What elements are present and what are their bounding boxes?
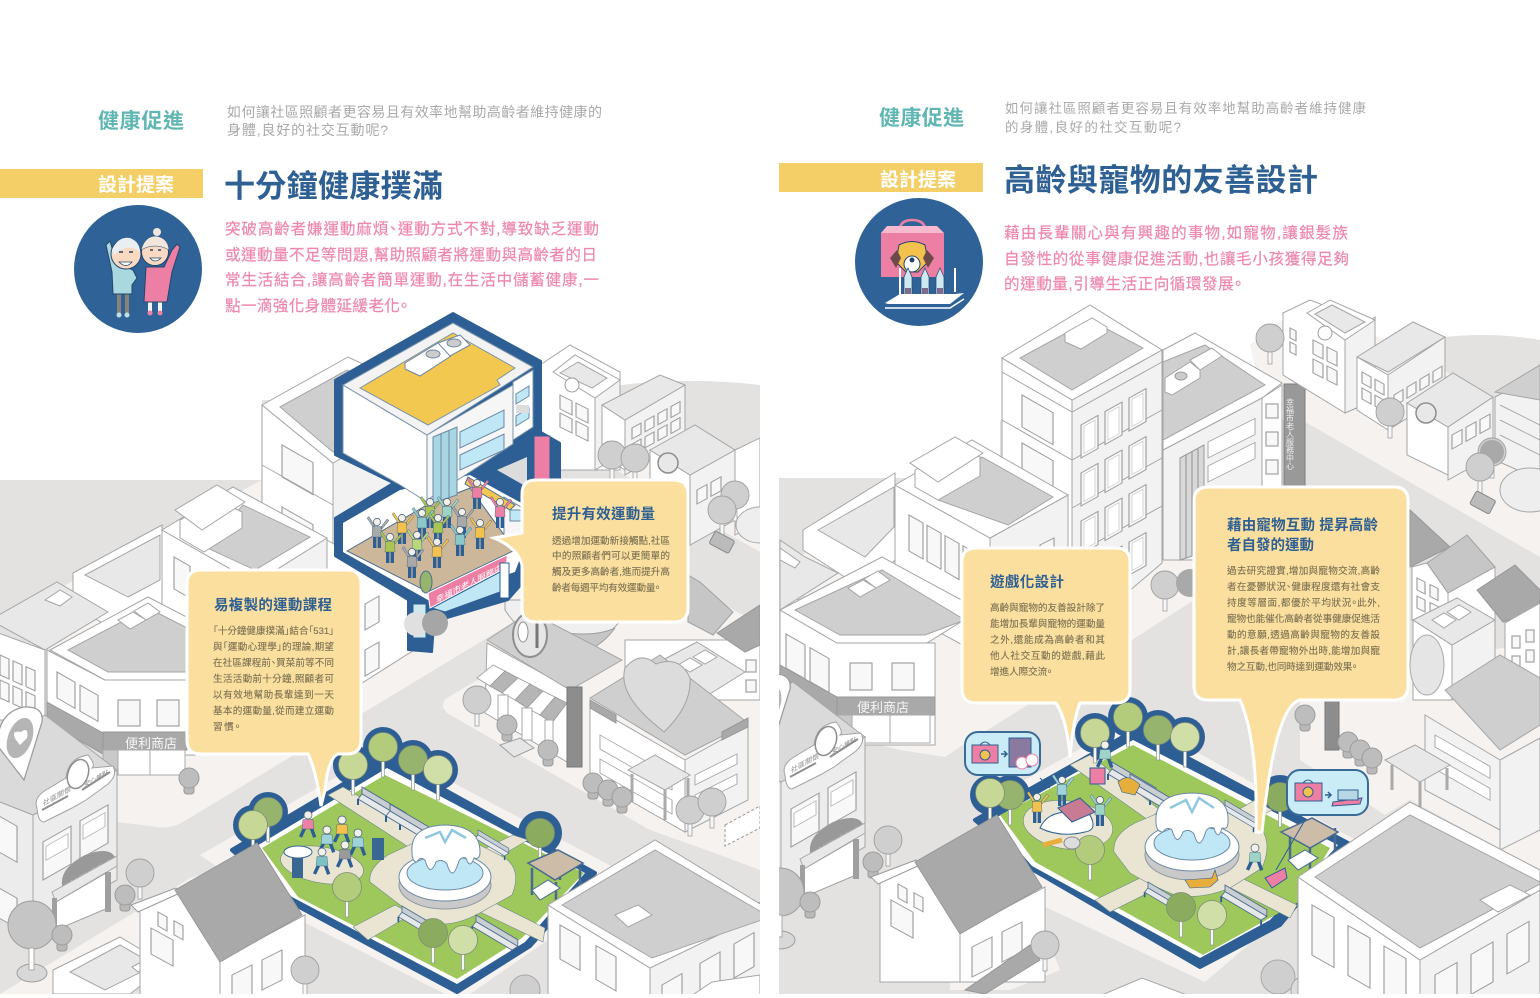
building: convenience store (46, 596, 200, 794)
trees front right (1076, 836, 1104, 880)
callout: gamified design (962, 548, 1130, 757)
vertical sign right panel: 幸福市老人服務中心 (1286, 398, 1294, 470)
pink vertical sign (534, 436, 550, 488)
paths (328, 786, 416, 846)
proposal title: 十分鐘健康撲滿 (224, 169, 443, 204)
icon bubble: game (965, 732, 1050, 788)
callout body: 動的意願,透過高齡與寵物的友善設 (1227, 629, 1380, 641)
building: mid rear (598, 375, 685, 484)
callout body: 物之互動,也同時達到運動效果。 (1227, 661, 1357, 673)
tag bar (0, 169, 203, 198)
icon: seniors waving (74, 205, 202, 333)
building back right with AC right panel (1410, 598, 1495, 700)
building: flat low roof (72, 524, 162, 622)
road base left (0, 381, 760, 994)
callout title (1227, 516, 1378, 554)
callout body: 計,讓長者帶寵物外出時,能增加與寵 (1227, 645, 1380, 657)
park outline right (975, 730, 1348, 967)
triangle courtyard (497, 457, 527, 487)
callout body: 觸及更多高齡者,進而提升高 (552, 566, 670, 578)
question text: 如何讓社區照顧者更容易且有效率地幫助高齡者維持健康的 (227, 104, 602, 120)
callout body: 基本的運動量,從而建立運動 (213, 705, 334, 717)
callout body: 持度等層面,都優於平均狀況。此外, (1227, 597, 1380, 609)
sidewalks left (0, 462, 760, 994)
building: tall rear centre (1002, 305, 1162, 650)
callout body: 增進人際交流。 (990, 666, 1052, 678)
heading: health promotion: 健康促進 (879, 106, 964, 130)
front column (500, 563, 509, 598)
house with grey roof (131, 843, 305, 998)
pink description: 或運動量不足等問題,幫助照顧者將運動與高齡者的日 (225, 245, 597, 264)
building: bottom right big right panel (1298, 802, 1540, 998)
fountain right (1145, 793, 1239, 880)
senior with dog and bottle game (1185, 820, 1305, 888)
pavilion right (1281, 818, 1338, 870)
group exercise runners (284, 811, 384, 878)
building: rear tall block (261, 356, 390, 544)
people exercising (367, 478, 512, 593)
tree bottom centre (510, 974, 540, 994)
trees back (338, 750, 368, 795)
game table with seniors (1027, 774, 1112, 849)
fountain (399, 825, 491, 909)
callout body: 中的照顧者們可以更簡單的 (552, 550, 670, 562)
house with grey roof right panel (871, 815, 1045, 982)
icon: dog carrier and bottles (855, 198, 983, 326)
callout body: 寵物也能催化高齡者從事健康促進活 (1227, 613, 1380, 625)
callout body: 透過增加運動新接觸點,社區 (552, 535, 670, 547)
rear clock building right panel (1256, 300, 1380, 418)
pink description (225, 220, 599, 315)
building: small light roof right panel (780, 540, 838, 660)
trees front (332, 872, 362, 917)
highlighted community building (335, 313, 560, 652)
park right (965, 697, 1368, 967)
trees back right (1080, 718, 1110, 763)
upper walls (343, 385, 427, 502)
building: back right with AC (625, 575, 760, 700)
icon bubble: bottles (1287, 770, 1368, 815)
road base right (779, 335, 1540, 994)
building: community center with pin sign (0, 707, 154, 982)
callout body: 習慣。 (213, 721, 240, 733)
pink description: 藉由長輩關心與有興趣的事物,如寵物,讓銀髮族 (1004, 223, 1348, 242)
question text: 如何讓社區照顧者更容易且有效率地幫助高齡者維持健康 (1005, 100, 1366, 116)
question text: 身體,良好的社交互動呢? (227, 122, 388, 138)
pink description: 的運動量,引導生活正向循環發展。 (1004, 275, 1242, 293)
low building with round sign right panel (1407, 365, 1540, 514)
blue outline (335, 313, 560, 652)
callout title: 提升有效運動量 (552, 505, 655, 523)
callout body (552, 535, 670, 594)
label: convenience store right: 便利商店 (857, 700, 909, 715)
callout: pet interaction (1194, 487, 1408, 832)
callout title: 藉由寵物互動 提昇高齡 (1227, 516, 1378, 534)
building: convenience store right panel (780, 557, 980, 745)
callout body: 高齡與寵物的友善設計除了 (990, 602, 1105, 614)
rear shop wall (504, 497, 526, 545)
callout body: 「十分鐘健康撲滿」結合「531」 (213, 625, 334, 637)
paths right (1070, 755, 1160, 820)
roof (343, 323, 533, 435)
callout body: 過去研究證實,增加與寵物交流,高齡 (1227, 565, 1380, 577)
glass columns (433, 427, 457, 503)
park left (232, 727, 595, 992)
houses behind callout right panel (1410, 510, 1540, 690)
callout body: 在社區課程前、買菜前等不同 (213, 657, 334, 669)
rear building with AC right panel (1151, 333, 1282, 611)
panel: left proposal (0, 313, 784, 998)
pavilion (528, 850, 583, 905)
building: dome restaurant (463, 600, 640, 767)
tree bottom (291, 956, 319, 996)
callout body (213, 625, 334, 733)
callout body: 能增加長輩與寵物的運動量 (990, 618, 1105, 630)
AC units (405, 343, 451, 376)
building: with penthouse right panel (895, 437, 1068, 660)
heading: health promotion: 健康促進 (98, 109, 184, 133)
header left (0, 104, 602, 333)
building: bottom right (548, 840, 770, 998)
rear building right panel 2 (1357, 322, 1445, 438)
pink description: 點一滴強化身體延緩老化。 (225, 297, 408, 315)
building: heart on roof (590, 655, 748, 832)
header right (779, 100, 1366, 326)
pink description: 常生活結合,讓高齡者簡單運動,在生活中儲蓄健康,一 (225, 270, 599, 289)
building: small light roof left (0, 582, 108, 720)
pink description: 突破高齡者嫌運動麻煩、運動方式不對,導致缺乏運動 (225, 220, 599, 238)
question text: 的身體,良好的社交互動呢? (1005, 119, 1181, 135)
grey trees front (404, 612, 428, 636)
building with grey roof and striped wall right panel (1425, 655, 1540, 850)
label: convenience store: 便利商店 (125, 736, 177, 751)
callout body: 生活活動前十分鐘,照顧者可 (213, 673, 334, 685)
sidewalks right (779, 300, 1540, 990)
low garage right panel (965, 931, 1059, 994)
vertical sign right panel (1284, 384, 1305, 487)
callout title: 者自發的運動 (1227, 536, 1314, 554)
glass front (432, 572, 500, 612)
building: clock tower rear (540, 345, 620, 470)
windows (460, 410, 504, 448)
shop sign pink: 幸福市老人服務中心 (436, 557, 511, 605)
blue halos behind trees right (970, 697, 1302, 819)
callout body: 以有效地幫助長輩達到一天 (213, 689, 334, 701)
building: with penthouse (161, 484, 328, 616)
callout body: 他人社交互動的遊戲,藉此 (990, 650, 1105, 662)
callout body: 與「運動心理學」的理論,期望 (213, 641, 334, 653)
callout body: 齡者每週平均有效運動量。 (552, 582, 660, 594)
panel: right proposal (718, 300, 1540, 998)
tag text: 設計提案 (98, 174, 174, 196)
pink description (1004, 223, 1349, 293)
callout: easy to replicate course (187, 570, 361, 806)
question text (1005, 100, 1366, 135)
building: low right with round sign (649, 424, 760, 554)
callout body (1227, 565, 1380, 673)
building: canopy and potted plants (583, 755, 760, 846)
callout body (990, 602, 1105, 678)
building: white walls under highlighted block (328, 540, 413, 684)
low building bottom centre (693, 974, 760, 994)
awning stripes (477, 665, 567, 723)
tag bar (779, 163, 983, 192)
benches (358, 787, 406, 830)
callout body: 之外,還能成為高齡者和其 (990, 634, 1105, 646)
benches right (1108, 762, 1156, 805)
building: front right wall right panel (1295, 700, 1450, 808)
building: flat low roof right panel (803, 473, 895, 590)
grey trees bottom right panel (1261, 960, 1319, 998)
lawn right (1000, 745, 1330, 955)
tag text: 設計提案 (880, 169, 956, 191)
roof tip bottom centre right panel (1090, 978, 1200, 998)
pink description: 自發性的從事健康促進活動,也讓毛小孩獲得足夠 (1004, 249, 1349, 268)
callout: raise effective exercise (494, 480, 688, 622)
proposal title: 高齡與寵物的友善設計 (1004, 163, 1318, 198)
callout body: 者在憂鬱狀況、健康程度還有社會支 (1227, 581, 1380, 593)
building: community center right panel (718, 674, 902, 949)
callout title: 易複製的運動課程 (214, 596, 332, 614)
senior walking dog (1090, 741, 1140, 795)
ground floor interior (343, 475, 525, 600)
lawn (262, 775, 584, 979)
park outline (232, 758, 595, 992)
blue halos behind trees (233, 727, 562, 855)
callout title: 遊戲化設計 (990, 573, 1064, 591)
question text (227, 104, 602, 138)
low buildings bottom left (52, 936, 140, 994)
